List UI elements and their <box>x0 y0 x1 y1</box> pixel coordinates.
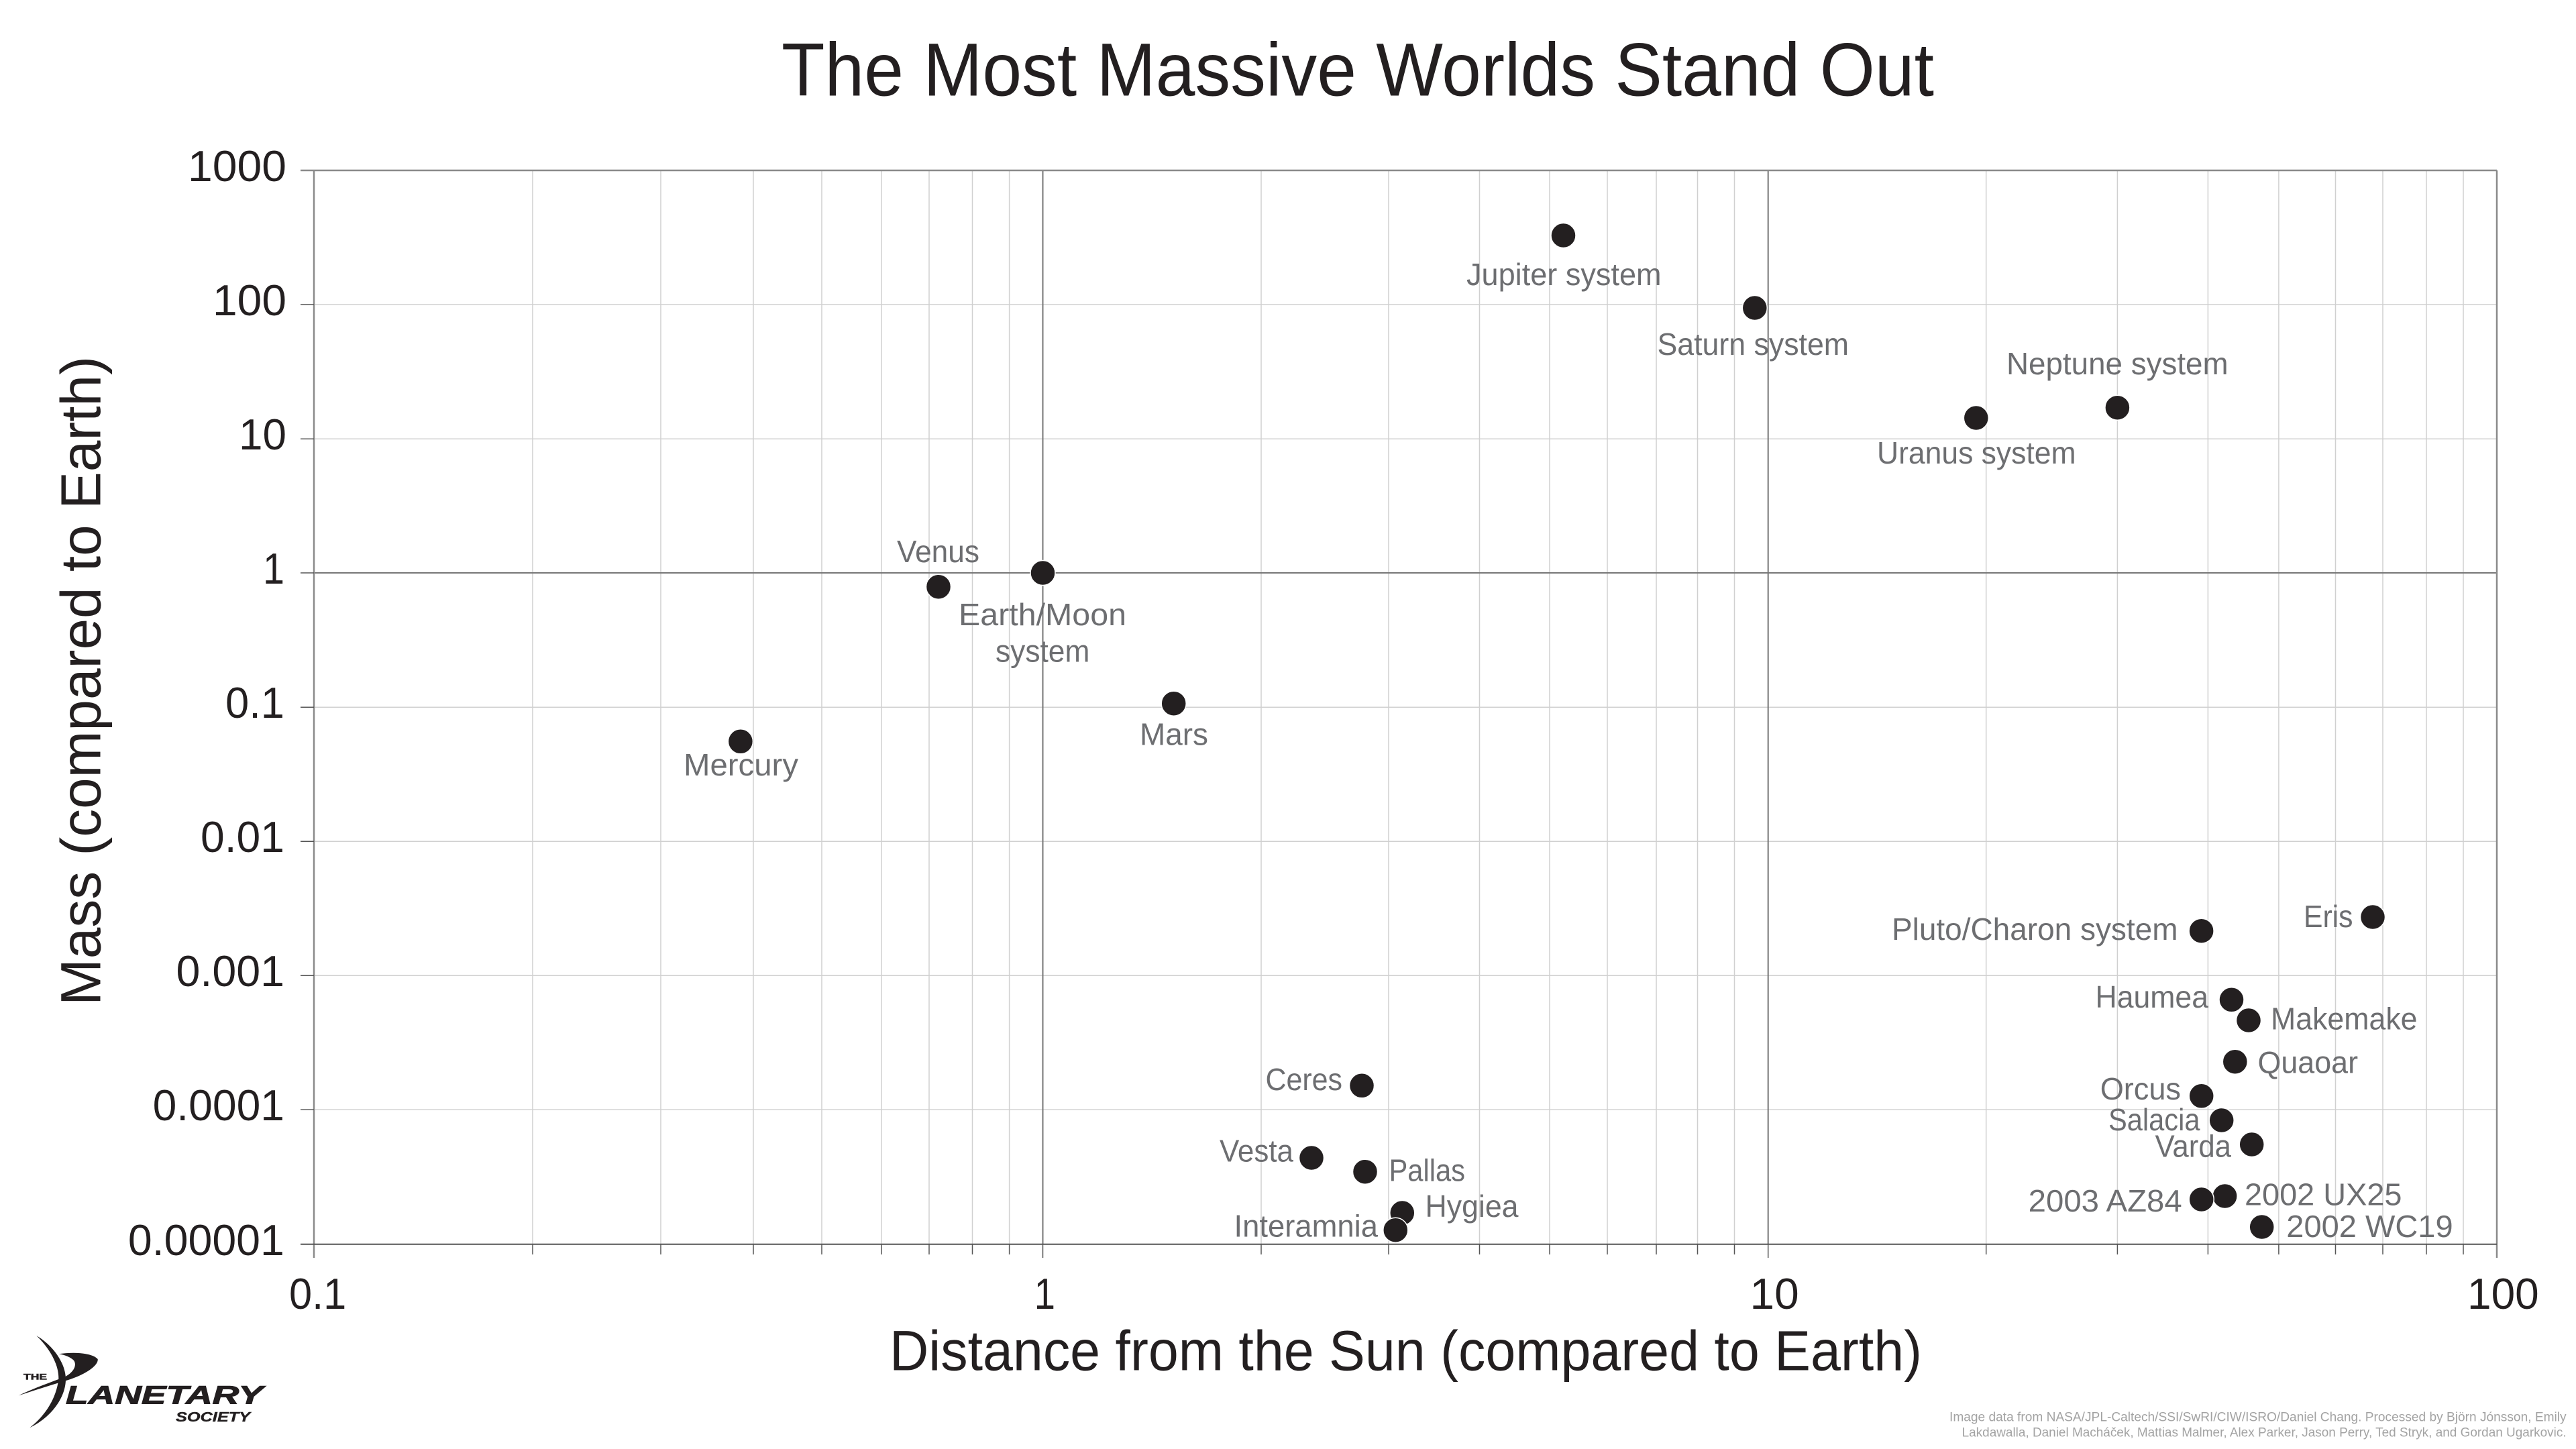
point: Hygiea: Hygiea <box>1425 1189 1519 1224</box>
point: Salacia: Salacia <box>2108 1102 2200 1137</box>
y axis tick labels: 1 <box>263 544 284 593</box>
point: Orcus <box>2100 1071 2214 1108</box>
logo text SOCIETY: SOCIETY <box>176 1410 252 1425</box>
point: Uranus system: Uranus system <box>1877 435 2076 470</box>
point: Pallas <box>1352 1153 1465 1188</box>
y axis tick labels: 0.01 <box>201 812 284 861</box>
point: Jupiter system <box>1466 223 1662 292</box>
point: Interamnia: Interamnia <box>1234 1208 1378 1243</box>
point: Varda: Varda <box>2155 1128 2231 1163</box>
point: Earth/Moon system <box>959 561 1126 669</box>
x axis title: Distance from the Sun (compared to Earth) <box>890 1320 1922 1383</box>
x axis tick labels: 0.1 <box>289 1269 346 1318</box>
title: The Most Massive Worlds Stand Out <box>782 28 1934 112</box>
point: Earth/Moon system: Earth/Moon <box>959 597 1126 632</box>
point: Earth/Moon system: system <box>996 634 1089 669</box>
point: Jupiter system: Jupiter system <box>1466 257 1662 292</box>
image credits <box>1949 1410 2567 1440</box>
data points <box>684 223 2453 1244</box>
point: Pallas: Pallas <box>1389 1153 1465 1188</box>
y axis title: Mass (compared to Earth) <box>49 356 112 1006</box>
y axis tick labels: 0.1 <box>225 678 284 727</box>
image credits: Image data from NASA/JPL-Caltech/SSI/SwRI/CIW/ISRO/Daniel Chang. Processed by Björn Jónsson, Emily <box>1949 1410 2567 1424</box>
point: Mars <box>1140 691 1208 752</box>
x axis tick labels <box>289 1269 2539 1318</box>
logo swoosh <box>19 1336 98 1428</box>
point: Saturn system: Saturn system <box>1657 327 1849 362</box>
point: Quaoar: Quaoar <box>2258 1044 2358 1079</box>
point: Uranus system <box>1877 405 2076 470</box>
point: Hygiea <box>1390 1189 1519 1225</box>
logo text PLANETARY: LANETARY <box>66 1382 266 1410</box>
point: Venus <box>897 534 979 599</box>
point: 2002 UX25: 2002 UX25 <box>2245 1177 2402 1212</box>
y axis tick labels: 0.00001 <box>128 1216 284 1265</box>
point: Vesta: Vesta <box>1220 1134 1293 1169</box>
x axis tick labels: 1 <box>1034 1269 1055 1318</box>
point: 2003 AZ84: 2003 AZ84 <box>2029 1183 2182 1218</box>
reference lines at 1 <box>314 170 2497 1244</box>
point: Ceres: Ceres <box>1265 1062 1342 1097</box>
x axis tick labels: 10 <box>1750 1269 1799 1318</box>
point: Saturn system <box>1657 295 1849 362</box>
point: 2002 WC19: 2002 WC19 <box>2286 1209 2453 1244</box>
y axis tick labels: 10 <box>239 410 286 459</box>
point: Eris <box>2304 899 2385 934</box>
point: Pluto/Charon system: Pluto/Charon system <box>1892 912 2178 947</box>
gridlines <box>314 170 2497 1244</box>
axes frame and ticks <box>301 170 2497 1258</box>
y axis tick labels: 0.0001 <box>153 1081 284 1130</box>
point: Venus: Venus <box>897 534 979 569</box>
x axis tick labels: 100 <box>2467 1269 2539 1318</box>
point: Orcus: Orcus <box>2100 1071 2181 1106</box>
y axis tick labels: 0.001 <box>176 947 284 996</box>
point: Neptune system <box>2006 346 2229 420</box>
point: Mars: Mars <box>1140 717 1208 752</box>
y axis tick labels: 100 <box>213 276 286 325</box>
point: Makemake: Makemake <box>2271 1001 2418 1036</box>
logo: The Planetary Society <box>19 1336 266 1428</box>
point: Neptune system: Neptune system <box>2006 346 2229 381</box>
point: Haumea: Haumea <box>2096 979 2208 1014</box>
logo text THE: THE <box>23 1373 47 1382</box>
y axis tick labels: 1000 <box>188 142 286 191</box>
point: Mercury <box>684 729 798 782</box>
point: Eris: Eris <box>2304 899 2353 934</box>
image credits: Lakdawalla, Daniel Macháček, Mattias Malmer, Alex Parker, Jason Perry, Ted Stryk, and Gordan Ugarkovic. <box>1962 1426 2567 1440</box>
y axis tick labels <box>128 142 286 1265</box>
point: Mercury: Mercury <box>684 747 798 782</box>
